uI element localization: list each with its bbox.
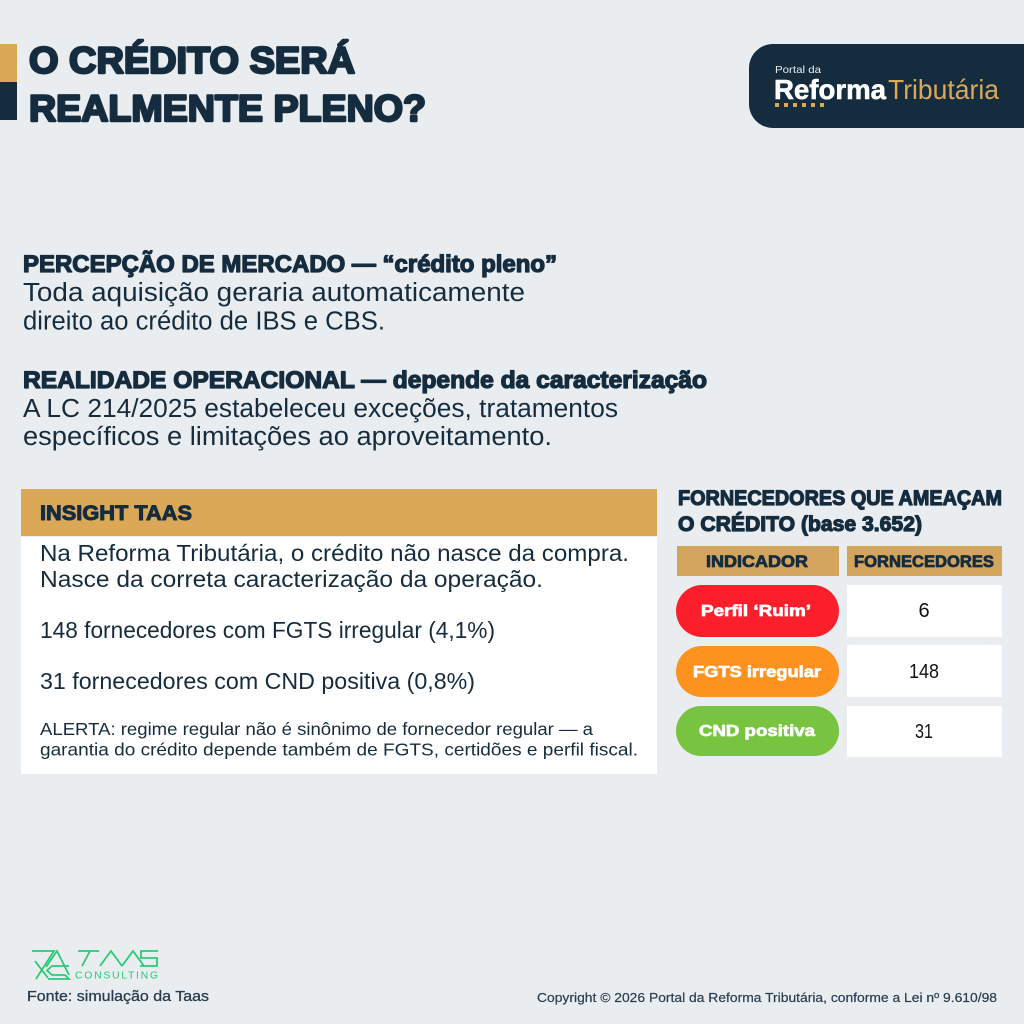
row: perfil ruim: Perfil ‘Ruim’ [701, 603, 811, 620]
insight text: Nasce da correta caracterização da operação. [40, 566, 543, 592]
copyright note: Copyright © 2026 Portal da Reforma Tributária, conforme a Lei nº 9.610/98 [537, 991, 997, 1005]
alert text: ALERTA: regime regular não é sinônimo de fornecedor regular — a [40, 719, 593, 739]
panel: insight TAAS [21, 489, 657, 774]
row: CND positiva: CND positiva [699, 723, 815, 740]
alert text [40, 719, 638, 760]
logo: TAAS Consulting: CONSULTING [75, 970, 158, 982]
heading: fornecedores que ameaçam o crédito: O CRÉDITO (base 3.652) [678, 513, 922, 536]
title: O CRÉDITO SERÁ [29, 40, 355, 81]
row: perfil ruim: 6 [918, 600, 930, 622]
title [29, 40, 426, 129]
logo: TAAS Consulting [32, 951, 158, 982]
text block: percepção de mercado: PERCEPÇÃO DE MERCADO — “crédito pleno” [23, 250, 557, 278]
heading: fornecedores que ameaçam o crédito [678, 487, 1002, 536]
logo: Portal da Reforma Tributária: Portal da [775, 64, 821, 76]
title: REALMENTE PLENO? [29, 88, 426, 129]
text block: percepção de mercado [23, 250, 557, 336]
table header: indicador: INDICADOR [706, 552, 808, 571]
table header: fornecedores [847, 546, 1002, 576]
table: indicadores [676, 546, 1002, 757]
heading: fornecedores que ameaçam o crédito: FORNECEDORES QUE AMEAÇAM [678, 487, 1002, 510]
text block: realidade operacional [23, 367, 707, 451]
row: FGTS irregular: 148 [909, 661, 939, 683]
text block: percepção de mercado: Toda aquisição geraria automaticamente [23, 279, 525, 307]
logo: Portal da Reforma Tributária: Tributária [888, 74, 999, 105]
text block: realidade operacional: A LC 214/2025 estabeleceu exceções, tratamentos [23, 395, 618, 423]
row: FGTS irregular: FGTS irregular [693, 664, 821, 681]
logo: Portal da Reforma Tributária [749, 44, 1024, 128]
row: FGTS irregular [676, 645, 1002, 697]
alert text: garantia do crédito depende também de FGTS, certidões e perfil fiscal. [40, 740, 638, 760]
insight text: 148 fornecedores com FGTS irregular (4,1%) [40, 617, 495, 643]
panel heading: INSIGHT TAAS [40, 502, 192, 525]
text block: realidade operacional: REALIDADE OPERACIONAL — depende da caracterização [23, 367, 707, 394]
row: CND positiva [676, 706, 1002, 757]
insight text [40, 540, 629, 694]
text block: realidade operacional: específicos e limitações ao aproveitamento. [23, 423, 552, 451]
row: CND positiva: 31 [915, 721, 933, 743]
text block: percepção de mercado: direito ao crédito de IBS e CBS. [23, 308, 385, 336]
insight text: 31 fornecedores com CND positiva (0,8%) [40, 668, 475, 694]
logo: Portal da Reforma Tributária: Reforma [774, 74, 886, 105]
table header: indicador [677, 546, 839, 576]
table header: fornecedores: FORNECEDORES [854, 552, 994, 571]
source note: Fonte: simulação da Taas [27, 989, 209, 1005]
title accent bar [0, 44, 17, 120]
row: perfil ruim [676, 585, 1002, 637]
insight text: Na Reforma Tributária, o crédito não nasce da compra. [40, 540, 629, 566]
